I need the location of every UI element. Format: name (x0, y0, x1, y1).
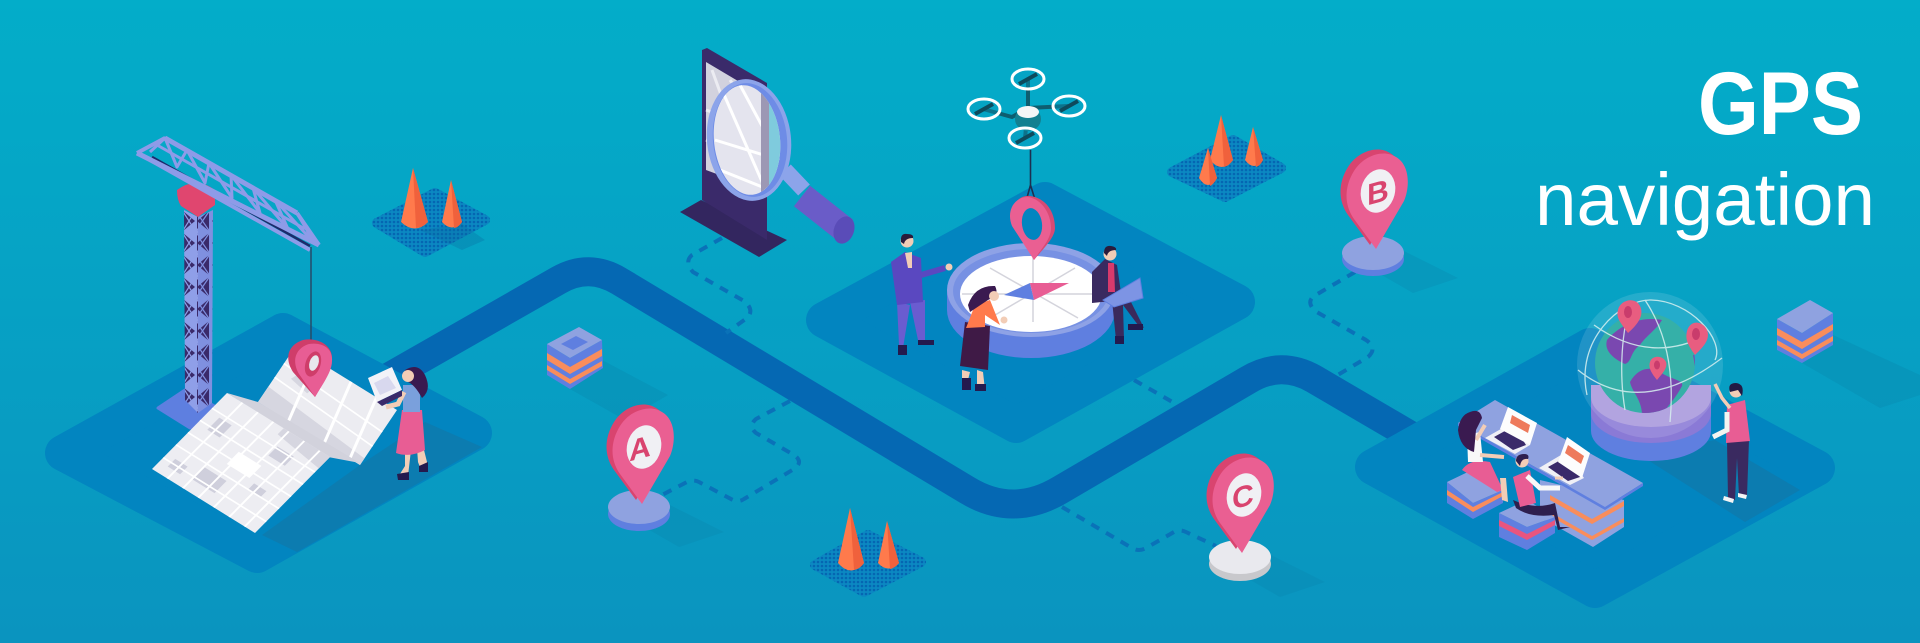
drone rotors (968, 69, 1085, 148)
person: seated man (1513, 454, 1570, 530)
map sheet: lower (152, 393, 330, 533)
magnifier handle (785, 170, 804, 190)
compass needle (1004, 283, 1034, 300)
panel: centre compass platform (824, 200, 1237, 425)
map shadow (262, 422, 482, 552)
folded city map (152, 347, 397, 533)
icon: tower crane (137, 138, 319, 428)
magnifier over billboard (680, 48, 858, 257)
panel: left map platform (63, 331, 482, 555)
icon: pin B: B (1367, 173, 1389, 212)
map fold (227, 393, 360, 463)
icon: pin C (1206, 453, 1325, 597)
icon: pin A: A (629, 429, 651, 468)
icon: drone with pin (968, 69, 1085, 205)
winding road (340, 272, 1425, 504)
title: GPS: GPS (1698, 53, 1863, 153)
icon: traffic cones top centre (1172, 115, 1281, 197)
glass dome (1577, 292, 1723, 438)
title: navigation: navigation (1535, 158, 1875, 241)
person: man touching globe (1713, 383, 1750, 503)
dashed connectors (660, 238, 1373, 550)
globe on pedestal (1577, 292, 1723, 461)
person: woman leaning over compass (960, 286, 1008, 391)
globe pins (1617, 300, 1708, 380)
person: seated woman (1458, 411, 1508, 502)
meridians (1578, 300, 1722, 422)
person: woman with laptop (368, 367, 428, 480)
icon: traffic cones bottom (815, 508, 921, 592)
stool: right (1499, 500, 1555, 550)
billboard map screen (706, 62, 765, 192)
laptop (1103, 278, 1143, 307)
person: man in suit (891, 234, 952, 355)
desk (1458, 400, 1643, 547)
compass (947, 243, 1115, 358)
icon: pin A (606, 404, 724, 547)
icon: pin C: C (1232, 477, 1254, 517)
laptop (368, 367, 402, 402)
laptop: left (1485, 407, 1537, 454)
stool: left (1447, 470, 1503, 519)
icon: traffic cones top left (377, 168, 485, 252)
billboard stand (680, 200, 787, 257)
icon: stacked cube right (1777, 300, 1920, 408)
panel: right workspace platform (1373, 346, 1817, 590)
compass location pin (1010, 196, 1055, 260)
icon: pin B (1340, 149, 1458, 293)
magnifier lens (701, 75, 797, 205)
globe shadow (1640, 440, 1800, 522)
laptop: right (1539, 437, 1590, 485)
pedestal (1591, 385, 1711, 461)
title (1535, 53, 1875, 241)
earth sphere (1595, 313, 1695, 413)
map location pin (288, 339, 332, 397)
icon: stacked cube left (547, 327, 668, 420)
map sheet: upper (258, 347, 397, 465)
person: seated man with laptop (1092, 246, 1144, 344)
